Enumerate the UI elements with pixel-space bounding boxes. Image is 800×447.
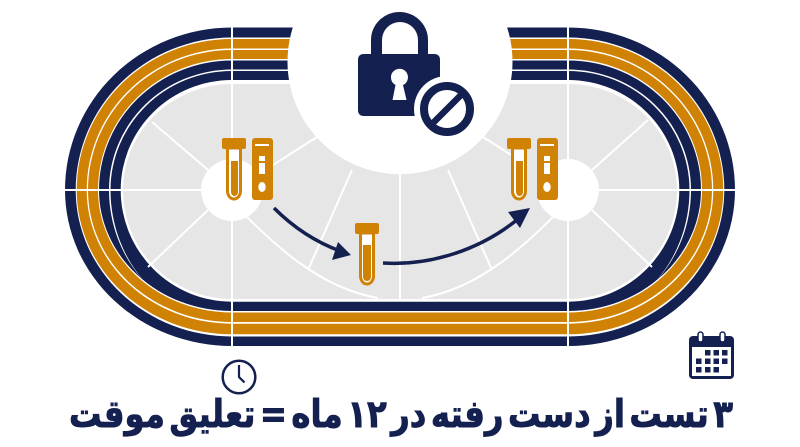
- icon: calendar: [689, 332, 734, 379]
- arrow: middle tube to right tube: [383, 208, 530, 263]
- icon: middle test tube: [355, 223, 379, 284]
- icon: lock with prohibition sign: [358, 12, 480, 142]
- icon: right test cassette: [537, 138, 558, 200]
- illustration: [65, 12, 735, 394]
- icon: left test cassette: [252, 138, 273, 200]
- arrow: left cassette to middle tube: [274, 208, 351, 260]
- running track: [65, 28, 735, 346]
- headline: ۳ تست از دست رفته در ۱۲ ماه = تعلیق موقت: [69, 392, 733, 436]
- icon: right test tube: [507, 138, 531, 199]
- icon: left test tube: [222, 138, 246, 199]
- top circular cut-out: [288, 0, 512, 174]
- icon: clock: [223, 361, 255, 393]
- infield: [65, 27, 735, 346]
